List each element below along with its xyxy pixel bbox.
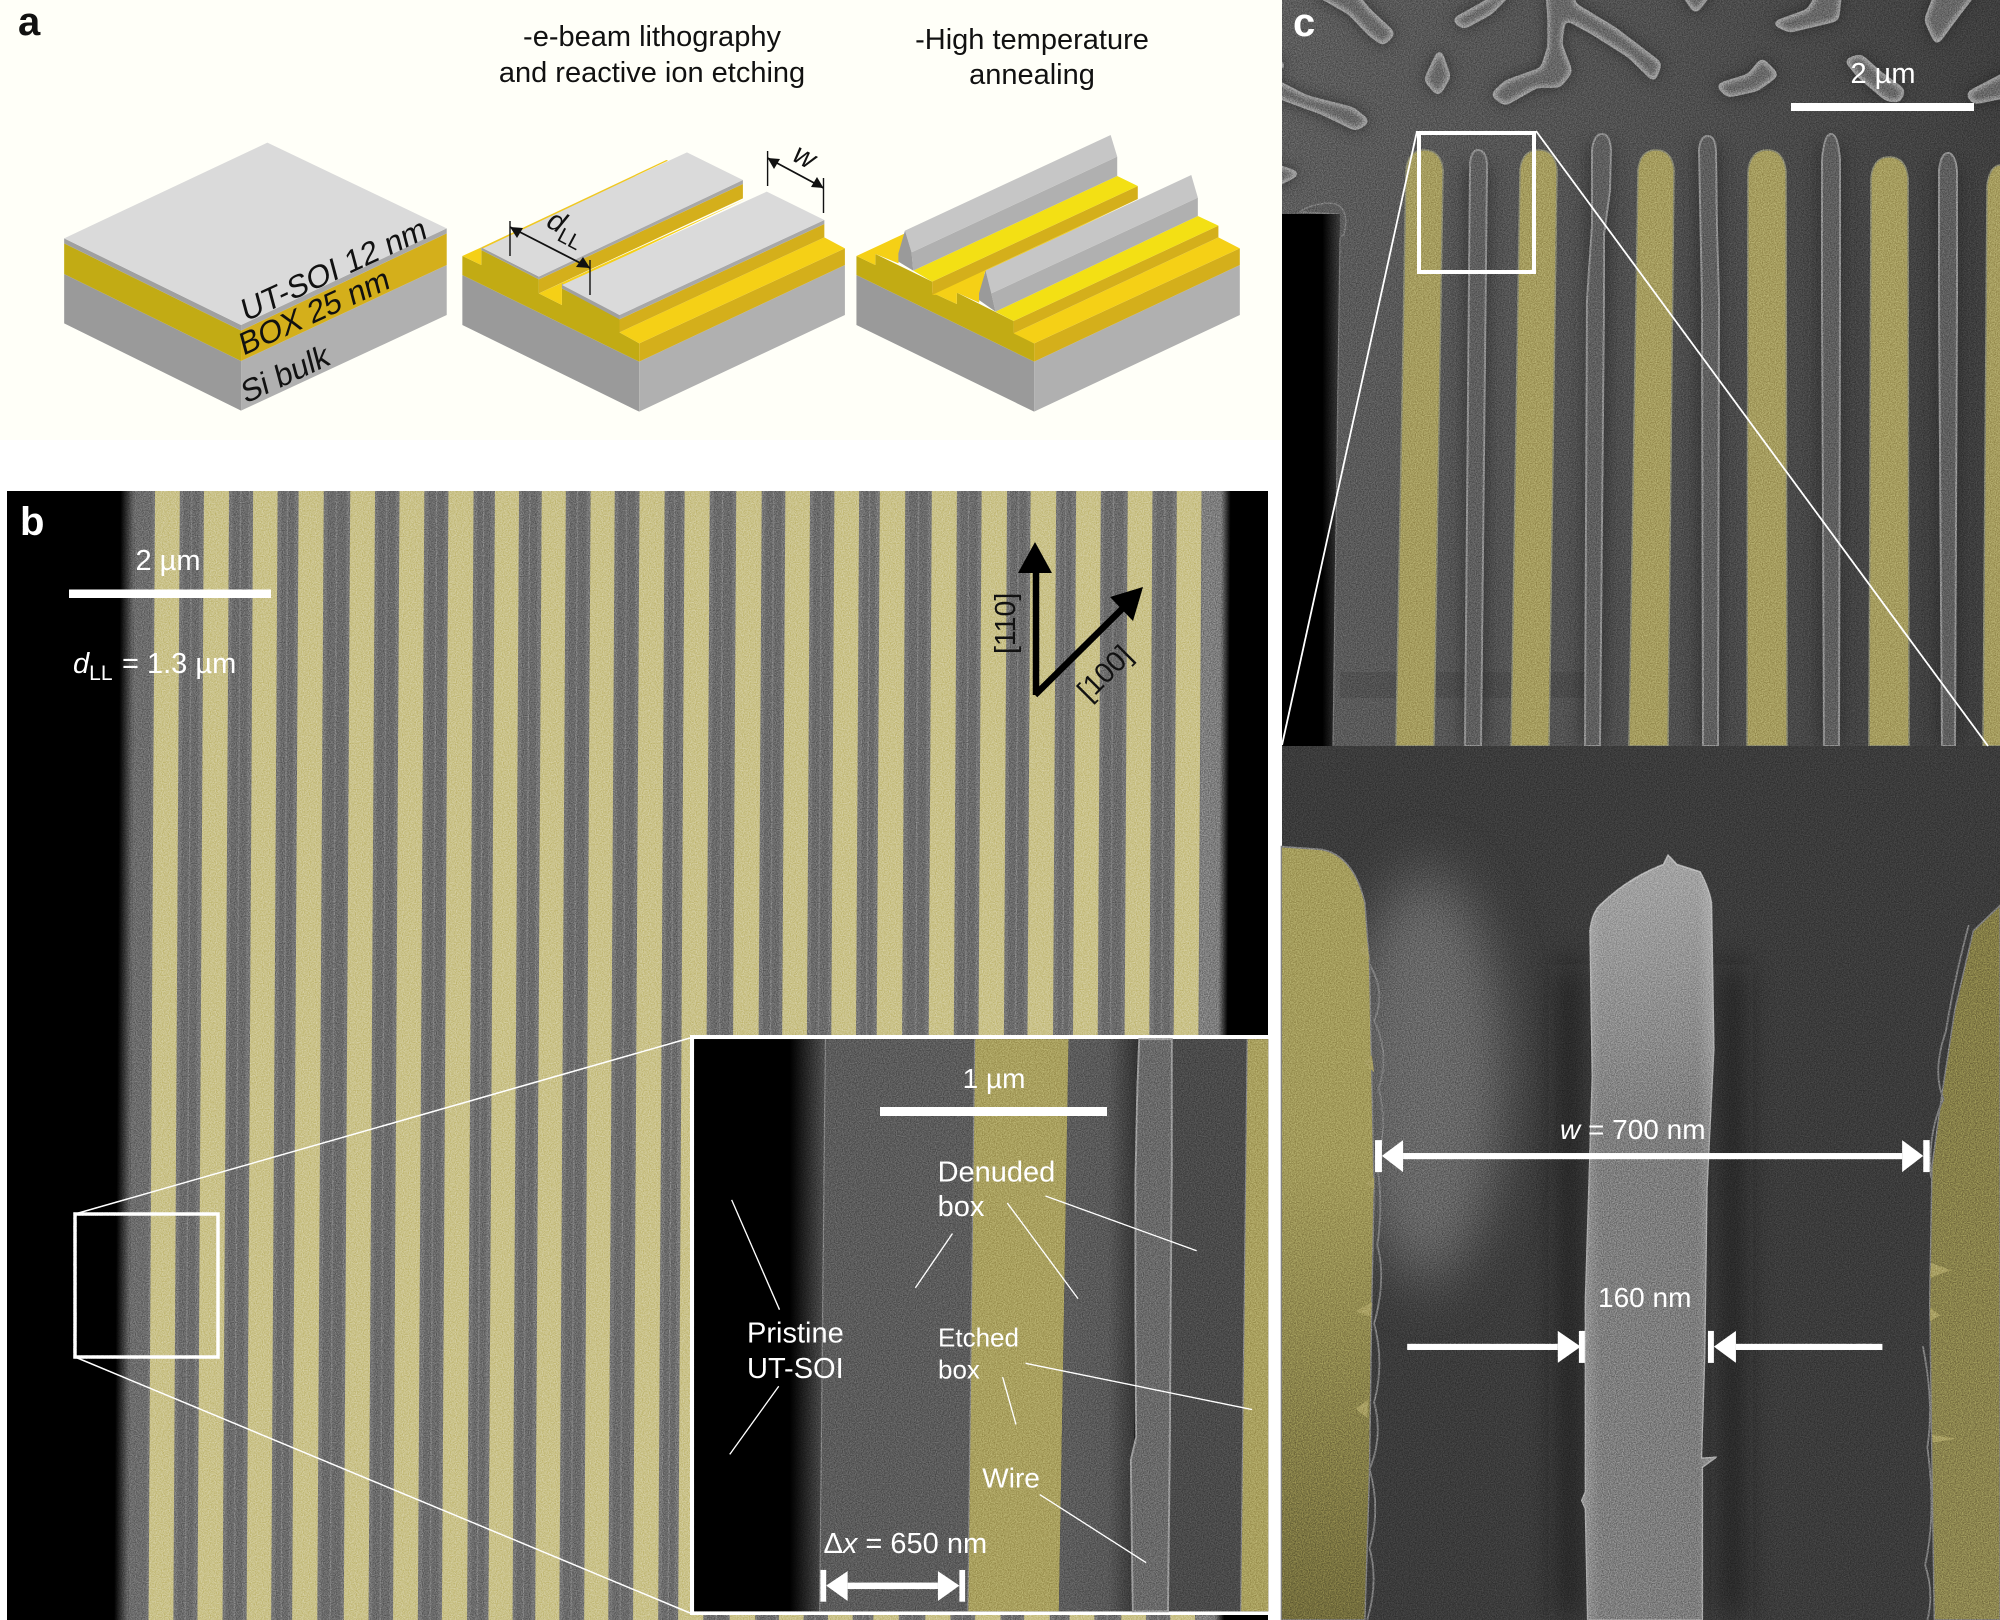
scale bar 2 µm bbox=[1791, 58, 1974, 111]
dimension: wire width 160 nm bbox=[1407, 1282, 1882, 1363]
block 1: pristine layer stack bbox=[64, 143, 447, 411]
scale bar 2 µm: 2 µm bbox=[1850, 58, 1916, 90]
panel label c: c bbox=[1293, 1, 1315, 45]
block 3: annealed wires bbox=[856, 135, 1240, 412]
inset label: denuded box: Denuded bbox=[938, 1156, 1055, 1188]
panel a: fabrication process bbox=[0, 0, 1282, 440]
inset label: wire: Wire bbox=[982, 1463, 1040, 1494]
yellow stripe right bbox=[1930, 906, 2000, 1620]
inset label: denuded box: box bbox=[938, 1191, 985, 1223]
inset: magnified view bbox=[690, 1035, 1268, 1615]
panel c bottom: magnified wire end bbox=[1281, 746, 2000, 1620]
etched box stripes in yellow bbox=[1396, 150, 2000, 746]
inset label: pristine UT-SOI: UT-SOI bbox=[747, 1353, 844, 1385]
dimension: w bbox=[768, 138, 824, 213]
zoom box and leader lines bbox=[75, 1038, 690, 1613]
zoom box and leader lines for panel c bbox=[1282, 131, 1988, 746]
layer label: UT-SOI: UT-SOI 12 nm bbox=[237, 209, 430, 329]
stripe array: yellow etched box and grey denuded lines bbox=[114, 491, 1231, 1620]
panel label b: b bbox=[20, 500, 44, 544]
central silicon wire bbox=[1582, 855, 1716, 1620]
inset scale bar 1 µm: 1 µm bbox=[963, 1063, 1025, 1094]
light glow beside left stripe bbox=[1349, 875, 1505, 1279]
block 2: etched stripes bbox=[462, 152, 845, 412]
dimension: w 700 nm: w = 700 nm bbox=[1560, 1114, 1706, 1145]
rough sidewall lines bbox=[1367, 925, 1969, 1620]
dimension: d_LL: LL bbox=[554, 224, 585, 255]
inset label: etched box: box bbox=[938, 1355, 980, 1385]
dimension: w: w bbox=[788, 138, 823, 177]
scale bar 2 µm: 2 µm bbox=[135, 545, 201, 577]
crystal axis arrows bbox=[990, 542, 1143, 707]
yellow stripe left bbox=[1281, 847, 1374, 1620]
crystal axis arrows: [100] bbox=[1071, 639, 1139, 707]
inset leader lines bbox=[730, 1196, 1252, 1563]
step heading: high temperature annealing: -High temperature bbox=[915, 24, 1149, 56]
panel b: SEM image of wire array bbox=[7, 491, 1268, 1620]
dimension: delta x bbox=[820, 1528, 987, 1602]
step heading: e-beam lithography: -e-beam lithography bbox=[523, 21, 781, 53]
dark halos around wires bbox=[1474, 145, 1949, 746]
inset label: etched box: Etched bbox=[938, 1322, 1019, 1352]
inset label: pristine UT-SOI: Pristine bbox=[747, 1318, 844, 1350]
black contact region at left bbox=[1282, 203, 1346, 746]
dimension: d_LL: d bbox=[542, 204, 571, 240]
dimension: d_LL bbox=[510, 204, 592, 295]
dimension: wire width 160 nm: 160 nm bbox=[1598, 1282, 1691, 1313]
stripe edge bumps bbox=[1356, 942, 1957, 1443]
crystal axis arrows: [110] bbox=[990, 593, 1022, 654]
step heading: high temperature annealing: annealing bbox=[969, 59, 1095, 91]
dimension: delta x: Δx = 650 nm bbox=[824, 1528, 987, 1560]
step heading: e-beam lithography: and reactive ion etching bbox=[499, 57, 805, 89]
silicon wires bbox=[1465, 134, 1957, 746]
scale bar 2 µm bbox=[69, 545, 271, 598]
horizontal contamination band bbox=[1340, 672, 1590, 698]
label: dLL value: = 1.3 µm bbox=[122, 648, 236, 680]
panel label a: a bbox=[18, 0, 41, 44]
panel c top: SEM overview of wire ends bbox=[1262, 0, 2000, 746]
inset scale bar 1 µm bbox=[880, 1063, 1107, 1116]
dimension: w 700 nm bbox=[1375, 1114, 1930, 1172]
label: dLL value: d bbox=[73, 648, 90, 680]
layer label: Si bulk: Si bulk bbox=[237, 336, 333, 411]
dark shadow beside wire bbox=[1569, 964, 1732, 1620]
dewetted silicon islands bbox=[1262, 0, 2000, 193]
label: dLL value: LL bbox=[89, 662, 112, 685]
layer label: BOX: BOX 25 nm bbox=[235, 260, 393, 363]
